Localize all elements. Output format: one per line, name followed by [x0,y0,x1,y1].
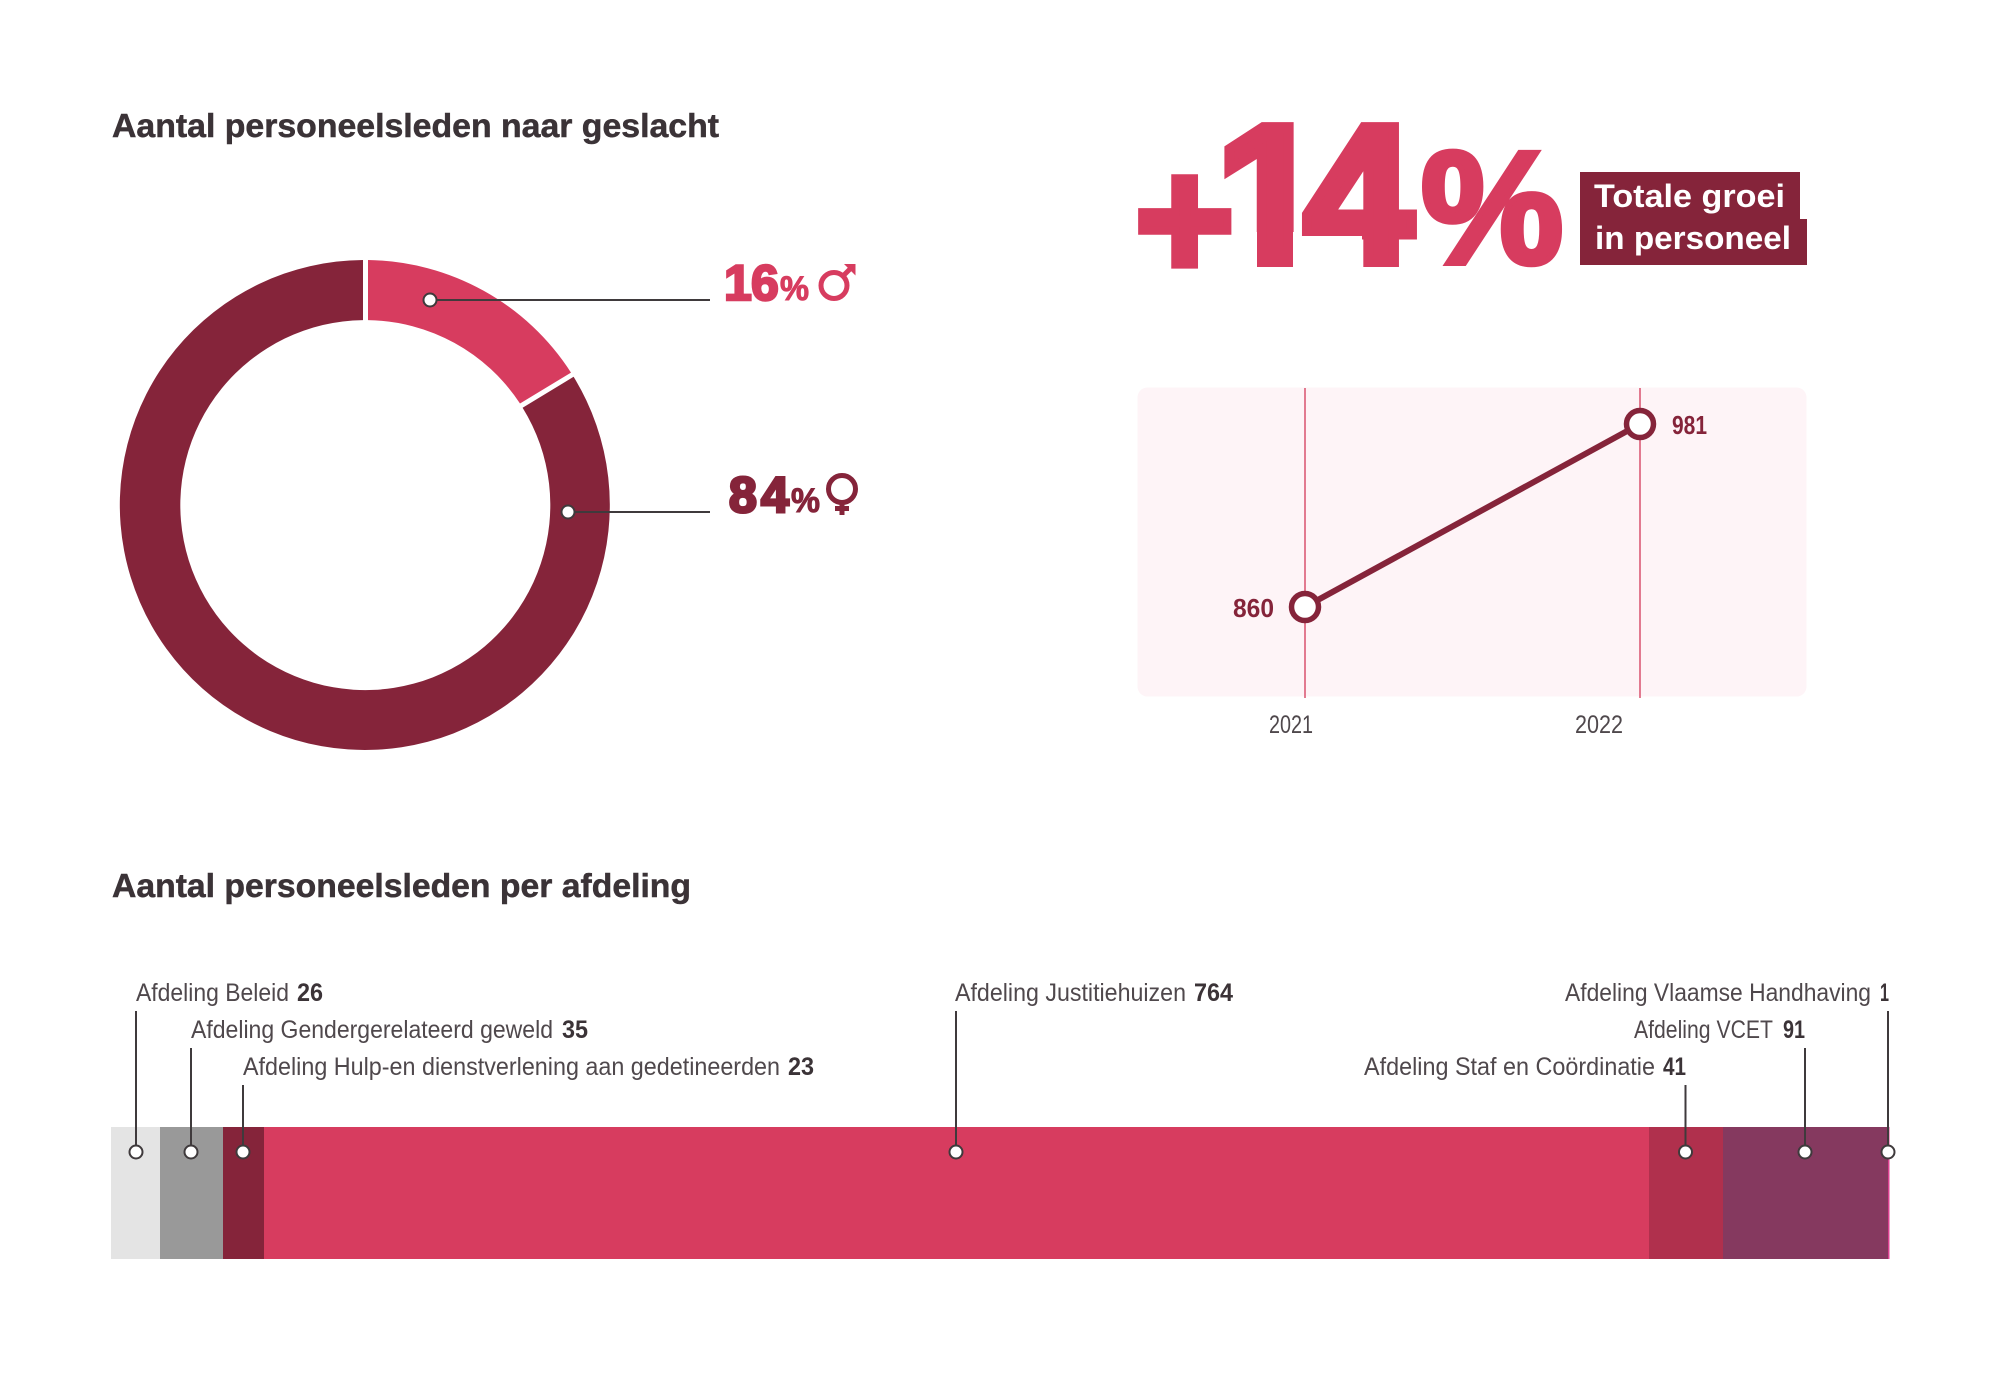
segment: men 16% [368,260,571,404]
big number: +14% [1138,122,1562,269]
donut chart: personnel by gender [120,260,610,750]
callout: Afdeling Gendergerelateerd geweld: Afdeling Gendergerelateerd geweld [191,1016,553,1044]
line chart: staff growth 2021-2022 [1138,388,1806,739]
big number: +14%: % [1421,118,1563,297]
line chart: staff growth 2021-2022: 2021 [1269,711,1313,739]
callout: Afdeling Gendergerelateerd geweld [184,1016,588,1158]
callout: Afdeling Justitiehuizen: Afdeling Justitiehuizen [955,979,1186,1007]
line chart: staff growth 2021-2022: 860 [1233,593,1274,623]
callout: Afdeling Gendergerelateerd geweld: 35 [562,1016,588,1044]
callout: Afdeling Hulp-en dienstverlening: Afdeling Hulp-en dienstverlening aan gedetineerden [243,1053,780,1081]
big number: +14%: + [1135,125,1234,315]
callout: Afdeling Staf en Coördinatie [1364,1053,1692,1158]
label: total growth: Totale groei [1594,178,1785,214]
callout: Afdeling VCET [1634,1016,1812,1158]
callout: men 16% [424,255,856,311]
label: total growth [1580,172,1807,265]
label: total growth: in personeel [1595,220,1791,256]
stacked bar: staff per department [111,1127,1890,1259]
callout: Afdeling Vlaamse Handhaving: Afdeling Vlaamse Handhaving [1565,979,1871,1007]
callout: Afdeling VCET: 91 [1783,1016,1805,1044]
icon: male symbol [821,264,856,298]
callout: Afdeling VCET: Afdeling VCET [1634,1016,1773,1044]
line chart: staff growth 2021-2022: 2022 [1575,711,1623,739]
callout: women 84%: 84 [729,467,789,523]
callout: women 84% [562,467,856,523]
segment: women 84% [120,260,610,750]
callout: men 16%: % [780,270,809,308]
big number: +14%: 14 [1216,85,1413,304]
callout: men 16%: 16 [724,255,779,311]
line chart: staff growth 2021-2022: 981 [1672,410,1707,440]
callout: Afdeling Justitiehuizen: 764 [1194,979,1233,1007]
heading: departments: Aantal personeelsleden per afdeling [112,867,691,904]
callout: Afdeling Beleid: Afdeling Beleid [136,979,289,1007]
callout: women 84%: % [791,482,820,520]
callout: Afdeling Hulp-en dienstverlening [236,1053,814,1158]
callout: Afdeling Staf en Coördinatie: 41 [1663,1053,1686,1081]
callout: Afdeling Vlaamse Handhaving [1565,979,1894,1158]
callout: Afdeling Vlaamse Handhaving: 1 [1880,979,1889,1007]
icon: female symbol [828,476,856,515]
callout: Afdeling Beleid: 26 [297,979,323,1007]
heading: gender: Aantal personeelsleden naar geslacht [112,107,719,144]
callout: Afdeling Justitiehuizen [950,979,1233,1158]
callout: Afdeling Beleid [130,979,323,1158]
callout: Afdeling Hulp-en dienstverlening: 23 [788,1053,814,1081]
callout: Afdeling Staf en Coördinatie: Afdeling Staf en Coördinatie [1364,1053,1655,1081]
